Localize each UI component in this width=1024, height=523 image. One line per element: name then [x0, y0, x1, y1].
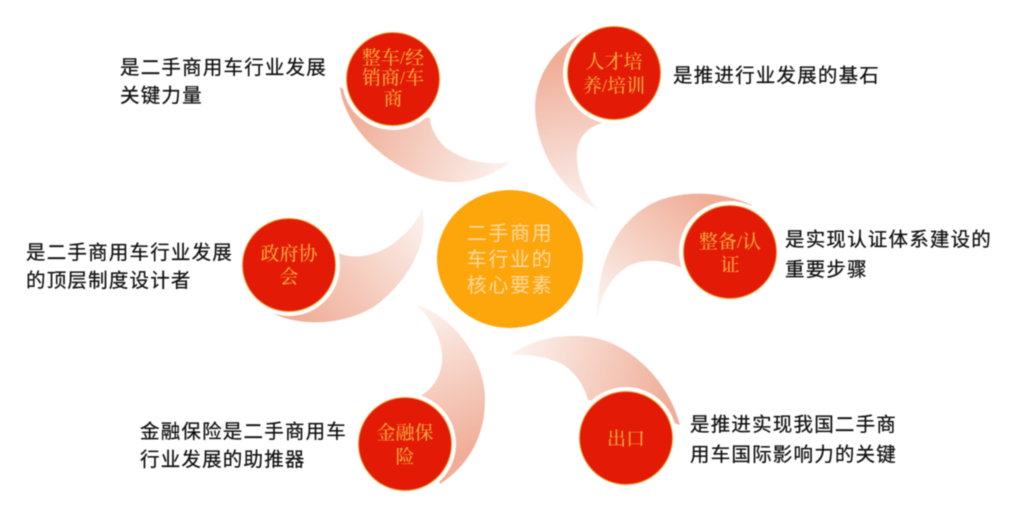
- node: 整备/认证: 整备/认: [699, 231, 761, 253]
- tail: right swoosh: [597, 194, 752, 320]
- node: 金融保险: 险: [395, 446, 415, 468]
- node: 整车/经销商/车商: 销商/车: [362, 67, 424, 89]
- node: 金融保险: [354, 393, 456, 495]
- text: top-left description: 是二手商用车行业发展: [120, 57, 327, 79]
- node: 政府协会: [238, 214, 340, 316]
- node: 政府协会: 政府协: [260, 243, 318, 265]
- text: lower-right description: 是推进实现我国二手商: [690, 414, 897, 436]
- text: lower-left description: [140, 421, 347, 471]
- tail: left swoosh: [270, 208, 424, 322]
- tail: top-left swoosh: [340, 87, 510, 182]
- node: 整备/认证: 证: [720, 254, 740, 276]
- node: 政府协会: 会: [279, 266, 299, 288]
- text: lower-left description: 行业发展的助推器: [140, 449, 306, 471]
- text: lower-left description: 金融保险是二手商用车: [140, 421, 347, 443]
- node: 整车/经销商/车商: 商: [383, 88, 403, 110]
- tail: top-right swoosh: [535, 33, 602, 210]
- node: 金融保险: 金融保: [376, 422, 434, 444]
- node: 人才培养/培训: 人才培: [585, 51, 643, 73]
- node: 整车/经销商/车商: [342, 28, 444, 130]
- central circle: 核心要素: [467, 274, 553, 297]
- text: right description: 重要步骤: [785, 259, 868, 281]
- text: top-right description: 是推进行业发展的基石: [673, 65, 880, 87]
- central circle: [437, 190, 583, 328]
- node: 整车/经销商/车商: 整车/经: [362, 47, 425, 69]
- text: left description: 是二手商用车行业发展: [26, 242, 233, 264]
- text: lower-right description: [690, 414, 897, 466]
- node: 人才培养/培训: 养/培训: [583, 75, 645, 97]
- node: 出口: [575, 387, 677, 489]
- text: right description: 是实现认证体系建设的: [785, 229, 992, 251]
- text: lower-right description: 用车国际影响力的关键: [690, 444, 897, 466]
- central circle: 二手商用: [467, 222, 553, 245]
- node: 出口: 出口: [607, 428, 645, 450]
- tail: lower-right swoosh: [510, 336, 680, 425]
- text: top-left description: [120, 57, 327, 107]
- tail: lower-left swoosh: [417, 305, 485, 484]
- text: left description: 的顶层制度设计者: [26, 270, 192, 292]
- text: left description: [26, 242, 233, 292]
- text: top-left description: 关键力量: [120, 85, 203, 107]
- text: right description: [785, 229, 992, 281]
- node: 人才培养/培训: [563, 22, 665, 124]
- central circle: 车行业的: [467, 248, 553, 271]
- node: 整备/认证: [679, 201, 781, 303]
